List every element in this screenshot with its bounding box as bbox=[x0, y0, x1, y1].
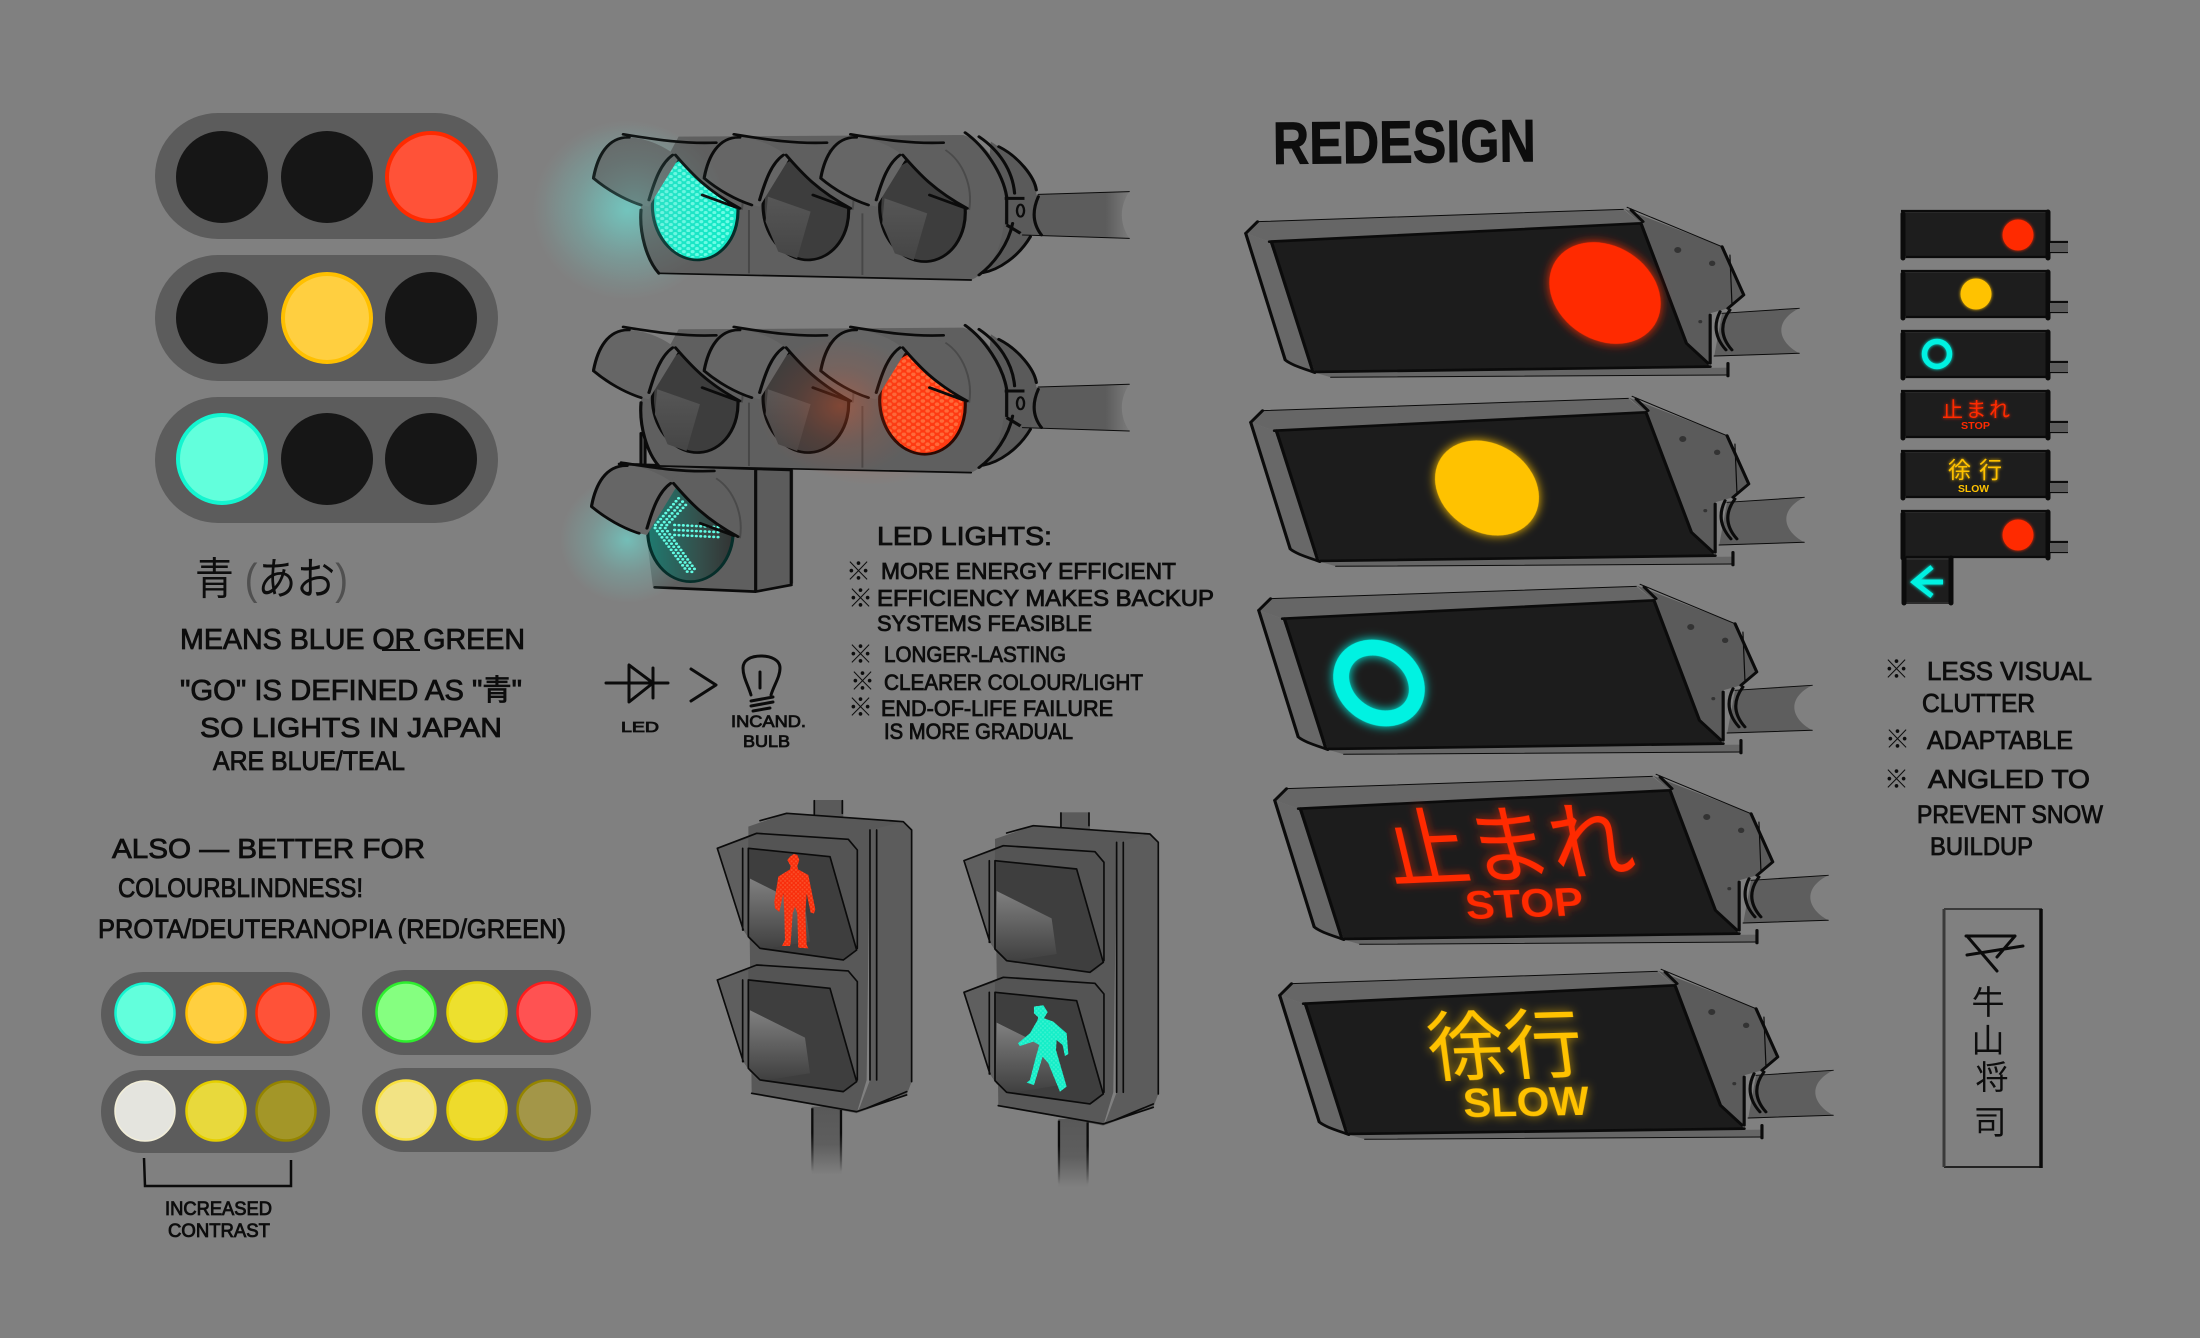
label: increased contrast bbox=[165, 1199, 272, 1242]
line: also better for: ALSO — BETTER FOR bbox=[112, 833, 425, 864]
signature characters bbox=[1972, 984, 2008, 1141]
bullet: angled: ※ bbox=[1884, 760, 1909, 796]
bullet: angled: PREVENT SNOW bbox=[1917, 801, 2103, 829]
lit red lens bbox=[876, 349, 969, 457]
redesign signal: teal ring bbox=[1259, 584, 1812, 754]
label: incandescent bulb: INCAND. bbox=[731, 712, 806, 731]
signature characters: 将 bbox=[1976, 1059, 2008, 1096]
signature mark bbox=[1966, 936, 2023, 971]
bullet: angled: BUILDUP bbox=[1930, 833, 2033, 861]
label: incandescent bulb: BULB bbox=[743, 732, 790, 751]
signal: normal colours green bbox=[362, 970, 591, 1055]
sign text: STOP: STOP bbox=[1463, 880, 1586, 928]
illustration: signal with green light bbox=[532, 120, 1129, 300]
illustration: pedestrian signals bbox=[717, 800, 1158, 1187]
flat signal: teal lit bbox=[155, 397, 498, 523]
bullet: backup systems: ※ bbox=[848, 579, 873, 615]
label: LED: LED bbox=[621, 719, 659, 736]
label: increased contrast: INCREASED bbox=[165, 1199, 272, 1220]
bullet: longer lasting: ※ bbox=[848, 635, 873, 671]
bullet: backup systems: EFFICIENCY MAKES BACKUP bbox=[877, 585, 1214, 611]
light: teal ring bbox=[1327, 633, 1431, 733]
figure: red standing bbox=[774, 854, 815, 948]
teal glow bbox=[532, 120, 722, 300]
bracket bbox=[144, 1158, 291, 1186]
signature characters: 山 bbox=[1972, 1022, 2004, 1059]
signal: colourblind view japan bbox=[101, 1070, 330, 1153]
icon: bulb bbox=[743, 656, 780, 711]
bullet: end of life: END-OF-LIFE FAILURE bbox=[881, 696, 1113, 721]
front signal: stop text: 止まれ bbox=[1942, 399, 2010, 422]
bullet: less clutter: ※ bbox=[1884, 650, 1909, 686]
bullet: less clutter: CLUTTER bbox=[1922, 688, 2035, 718]
label: increased contrast: CONTRAST bbox=[168, 1221, 270, 1242]
label: incandescent bulb bbox=[731, 712, 806, 751]
bullet: adaptable bbox=[1885, 720, 2073, 756]
bullet: angled bbox=[1884, 760, 2103, 861]
redesign signal: stop text bbox=[1275, 774, 1828, 944]
text block: meaning of ao bbox=[180, 555, 525, 776]
bullet: less clutter bbox=[1884, 650, 2092, 718]
bullet: less clutter: LESS VISUAL bbox=[1927, 656, 2092, 686]
sign text: jokou: 徐行 bbox=[1422, 1003, 1588, 1092]
pedestrian signal: green bbox=[964, 812, 1158, 1187]
bullet: energy efficient: MORE ENERGY EFFICIENT bbox=[881, 558, 1176, 584]
pedestrian signal: red bbox=[717, 800, 912, 1175]
greater than bbox=[691, 669, 716, 701]
bullet: longer lasting bbox=[848, 635, 1066, 671]
bullet: adaptable: ADAPTABLE bbox=[1927, 725, 2073, 755]
line: lights in japan: SO LIGHTS IN JAPAN bbox=[200, 712, 502, 743]
front signal: red with arrow bbox=[1901, 511, 2068, 603]
bullet: adaptable: ※ bbox=[1885, 720, 1910, 756]
front signal: yellow bbox=[1901, 271, 2068, 318]
icon: LED diode bbox=[606, 665, 668, 702]
illustration: signal with red light and arrow bbox=[560, 325, 1129, 603]
signature characters: 牛 bbox=[1972, 984, 2004, 1021]
flat signal: red lit bbox=[155, 113, 498, 239]
bullet: backup systems bbox=[848, 579, 1214, 636]
bullet: energy efficient bbox=[846, 552, 1176, 588]
panel: flat signal diagrams, red yellow teal bbox=[155, 113, 498, 523]
arrow box bbox=[1904, 558, 1951, 603]
figure: green walking bbox=[1018, 1005, 1068, 1092]
bullet: end of life: IS MORE GRADUAL bbox=[884, 719, 1073, 744]
redesign signal: slow text bbox=[1280, 969, 1833, 1139]
line: means blue or green: MEANS BLUE OR GREEN bbox=[180, 624, 525, 656]
front signal: red bbox=[1901, 211, 2068, 258]
title: redesign: REDESIGN bbox=[1272, 107, 1536, 177]
line: blue teal: ARE BLUE/TEAL bbox=[213, 746, 405, 776]
flat signal: yellow lit bbox=[155, 255, 498, 381]
bullet: clearer colour bbox=[850, 662, 1143, 698]
dotted arrow bbox=[654, 498, 722, 573]
red glow bbox=[766, 326, 979, 486]
bullet: clearer colour: CLEARER COLOUR/LIGHT bbox=[884, 670, 1143, 695]
heading: ao: 青 (あお) bbox=[195, 555, 348, 604]
signal: colourblind view green bbox=[362, 1068, 591, 1152]
redesign signal: yellow bbox=[1251, 396, 1804, 566]
bullet: angled: ANGLED TO bbox=[1928, 764, 2090, 794]
lit teal lens bbox=[648, 154, 742, 262]
light: red ellipse bbox=[1530, 221, 1680, 365]
front signal: slow text bbox=[1901, 451, 2068, 498]
bullet: longer lasting: LONGER-LASTING bbox=[884, 642, 1066, 667]
artist signature box bbox=[1944, 909, 2042, 1168]
line: colourblindness: COLOURBLINDNESS! bbox=[118, 873, 363, 903]
bullet: end of life: ※ bbox=[848, 688, 873, 724]
heading: LED lights: LED LIGHTS: bbox=[877, 521, 1052, 551]
bullet: energy efficient: ※ bbox=[846, 552, 871, 588]
front signal: stop text: STOP bbox=[1961, 421, 1990, 432]
text block: LED lights bbox=[846, 521, 1214, 744]
arrow head housing bbox=[560, 433, 793, 603]
bullet: clearer colour: ※ bbox=[850, 662, 875, 698]
bullet: end of life bbox=[848, 688, 1113, 744]
signature characters: 司 bbox=[1974, 1104, 2006, 1141]
text block: redesign benefits bbox=[1884, 650, 2103, 861]
front signal: slow text: SLOW bbox=[1958, 484, 1990, 495]
sign text: SLOW: SLOW bbox=[1461, 1078, 1591, 1126]
bullet: backup systems: SYSTEMS FEASIBLE bbox=[877, 611, 1092, 636]
panel: front view signals bbox=[1901, 211, 2068, 603]
front signal: stop text bbox=[1901, 391, 2068, 438]
light: yellow ellipse bbox=[1417, 421, 1557, 555]
diagram: LED greater than bulb bbox=[606, 656, 806, 751]
front signal: slow text: 徐行 bbox=[1948, 457, 2002, 483]
text block: colourblindness bbox=[98, 833, 566, 944]
line: go defined: "GO" IS DEFINED AS "青" bbox=[180, 674, 522, 707]
front signal: teal ring bbox=[1901, 331, 2068, 378]
panel: colourblindness comparison signals bbox=[101, 970, 591, 1242]
line: prota deuteranopia: PROTA/DEUTERANOPIA (RED/GREEN) bbox=[98, 914, 566, 944]
sign text: tomare: 止まれ bbox=[1374, 794, 1643, 900]
signal: normal colours japan bbox=[101, 972, 330, 1056]
redesign signal: red bbox=[1246, 207, 1799, 377]
